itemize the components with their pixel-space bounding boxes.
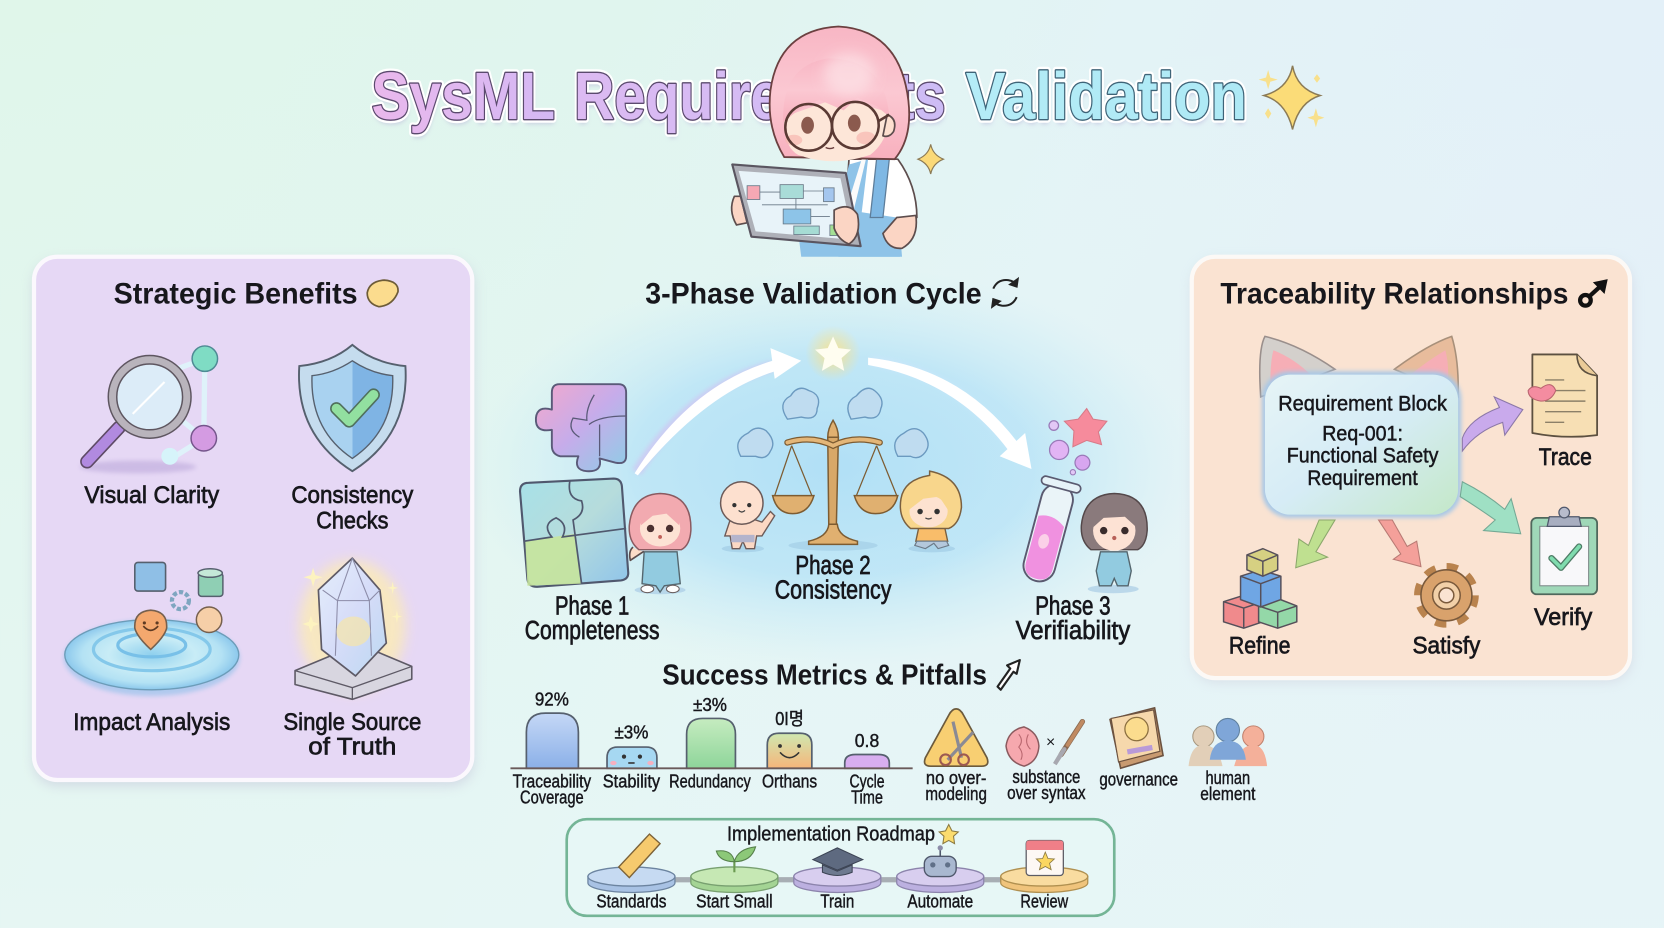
labels: Time bbox=[851, 787, 883, 807]
arrow: satisfy bbox=[1379, 520, 1421, 567]
icon: building blocks bbox=[1224, 549, 1297, 628]
label: Consistency bbox=[291, 482, 414, 509]
label: Single Source bbox=[283, 709, 421, 736]
label: Satisfy bbox=[1412, 633, 1481, 660]
icon: arrow link bbox=[1580, 279, 1608, 306]
title: SysML bbox=[371, 59, 555, 134]
labels bbox=[513, 771, 885, 807]
icon: shield bbox=[299, 345, 406, 471]
pitfall: governance: governance bbox=[1099, 769, 1178, 789]
arrow: phase 2 to 3 bbox=[868, 358, 1032, 469]
label: Refine bbox=[1229, 633, 1290, 660]
character: bald child bbox=[721, 482, 775, 552]
labels: Traceability bbox=[513, 771, 591, 791]
pitfall: human element: human bbox=[1206, 768, 1250, 788]
character: blond child bbox=[900, 471, 961, 552]
pitfall: substance over syntax bbox=[1006, 722, 1086, 803]
character: brown-haired child bbox=[1081, 493, 1147, 593]
panel: implementation roadmap bbox=[567, 819, 1114, 916]
label bbox=[291, 482, 414, 534]
icon: balance scale bbox=[773, 420, 898, 551]
label bbox=[1016, 592, 1130, 645]
title: SysML bbox=[373, 64, 556, 139]
bar: orthans: 0I명 bbox=[775, 709, 804, 729]
icon: impact ripple bbox=[64, 562, 240, 696]
character: girl with tablet bbox=[732, 27, 917, 257]
title: SysML bbox=[371, 59, 555, 134]
character: pink-haired child bbox=[629, 493, 691, 594]
title: Requirements bbox=[574, 59, 946, 134]
icon: small sparkle bbox=[918, 144, 943, 174]
label bbox=[525, 592, 660, 645]
chart: metric bars bbox=[510, 690, 913, 807]
bar: cycle time bbox=[845, 731, 889, 768]
label: Consistency bbox=[775, 577, 892, 605]
icon: puzzle piece bbox=[536, 384, 626, 471]
icon: assembled puzzle bbox=[520, 479, 628, 587]
heading: 3-Phase Validation Cycle bbox=[645, 277, 982, 310]
section: success metrics and pitfalls bbox=[510, 659, 1267, 807]
bar: redundancy: ±3% bbox=[693, 695, 727, 715]
icon: document bbox=[1528, 354, 1597, 437]
glasses bbox=[785, 102, 889, 151]
title bbox=[371, 59, 1248, 139]
arrow: refine bbox=[1296, 520, 1335, 568]
text: Req-001: bbox=[1322, 422, 1403, 445]
text bbox=[1278, 393, 1447, 490]
step: automate bbox=[897, 845, 984, 911]
heading: Traceability Relationships bbox=[1220, 277, 1568, 310]
label: Phase 3 bbox=[1035, 592, 1111, 620]
bar: redundancy bbox=[687, 695, 735, 768]
labels: Orthans bbox=[762, 771, 817, 791]
title: Validation bbox=[966, 59, 1247, 134]
title: Validation bbox=[967, 64, 1248, 139]
bar: stability bbox=[607, 723, 657, 768]
pitfall: no over-modeling: modeling bbox=[925, 784, 987, 804]
label bbox=[775, 552, 892, 605]
pitfall: human element: element bbox=[1200, 784, 1255, 804]
icon: crystal bbox=[295, 558, 412, 699]
pitfall: no over-modeling bbox=[925, 709, 988, 804]
connector bbox=[637, 877, 1045, 882]
title: Requirements bbox=[575, 64, 947, 139]
label: Phase 2 bbox=[795, 552, 871, 580]
labels: Coverage bbox=[520, 787, 584, 807]
label: Impact Analysis bbox=[73, 709, 230, 736]
text: Requirement Block bbox=[1278, 393, 1447, 416]
tablet bbox=[732, 164, 861, 246]
title: Requirements bbox=[574, 59, 946, 134]
step: start small: Start Small bbox=[696, 891, 773, 911]
icon: rocket arrow bbox=[998, 660, 1020, 690]
arrow: phase 1 to 2 bbox=[635, 348, 801, 475]
step: review bbox=[1001, 840, 1088, 911]
step: standards: Standards bbox=[596, 891, 666, 911]
label: Trace bbox=[1539, 444, 1592, 471]
icon: gear bbox=[1418, 567, 1475, 624]
heading: Success Metrics & Pitfalls bbox=[662, 659, 987, 691]
arrow: verify bbox=[1460, 482, 1521, 534]
label: Checks bbox=[316, 507, 388, 534]
icon: clipboard bbox=[1531, 507, 1597, 594]
bar: stability: ±3% bbox=[614, 723, 648, 743]
labels: Redundancy bbox=[669, 771, 751, 791]
hair and face bbox=[770, 27, 909, 161]
section: 3-phase validation cycle bbox=[467, 265, 1199, 669]
label: Verifiability bbox=[1016, 617, 1130, 645]
step: train: Train bbox=[820, 891, 854, 911]
text: Functional Safety bbox=[1287, 445, 1439, 468]
icon: title sparkle bbox=[1259, 66, 1324, 129]
icon: cycle bbox=[992, 279, 1018, 307]
label: Completeness bbox=[525, 617, 660, 645]
pitfall: no over-modeling: no over- bbox=[926, 768, 986, 788]
label: Verify bbox=[1534, 604, 1593, 631]
title: Validation bbox=[966, 59, 1247, 134]
pitfall: substance over syntax: substance bbox=[1012, 767, 1080, 787]
bar: cycle time: 0.8 bbox=[855, 731, 879, 751]
pitfall: substance over syntax: × bbox=[1046, 734, 1055, 751]
panel: traceability relationships bbox=[1192, 257, 1631, 681]
glow bbox=[467, 265, 1199, 669]
heading: Implementation Roadmap bbox=[727, 823, 935, 845]
pitfall: human element bbox=[1189, 718, 1267, 804]
panel: strategic benefits bbox=[34, 257, 473, 785]
icon: test tube bbox=[1016, 409, 1107, 586]
axis bbox=[510, 767, 913, 769]
labels: Cycle bbox=[850, 771, 885, 791]
pitfall: governance bbox=[1099, 708, 1178, 789]
step: train bbox=[794, 848, 881, 911]
bar: orthans bbox=[767, 709, 812, 768]
bar: traceability coverage: 92% bbox=[535, 690, 569, 710]
label bbox=[283, 709, 421, 760]
step: automate: Automate bbox=[907, 891, 973, 911]
bar: traceability coverage bbox=[526, 690, 578, 768]
icon: star bbox=[939, 825, 958, 844]
label: of Truth bbox=[308, 733, 396, 760]
icon: gem bbox=[367, 280, 398, 307]
step: review: Review bbox=[1020, 891, 1069, 911]
step: start small bbox=[691, 847, 778, 911]
labels: Stability bbox=[603, 771, 660, 791]
icon: magnifier with network bbox=[80, 346, 218, 473]
icon: star bbox=[805, 326, 861, 381]
step: standards bbox=[588, 834, 675, 911]
requirement block bbox=[1260, 336, 1461, 518]
label: Phase 1 bbox=[555, 592, 629, 620]
icon: clouds bbox=[738, 388, 928, 458]
overalls body bbox=[732, 159, 917, 257]
arrow: trace bbox=[1462, 397, 1523, 451]
label: Visual Clarity bbox=[84, 482, 220, 509]
text: Requirement bbox=[1307, 467, 1418, 490]
pitfall: substance over syntax: over syntax bbox=[1007, 783, 1086, 803]
heading: Strategic Benefits bbox=[114, 277, 358, 310]
